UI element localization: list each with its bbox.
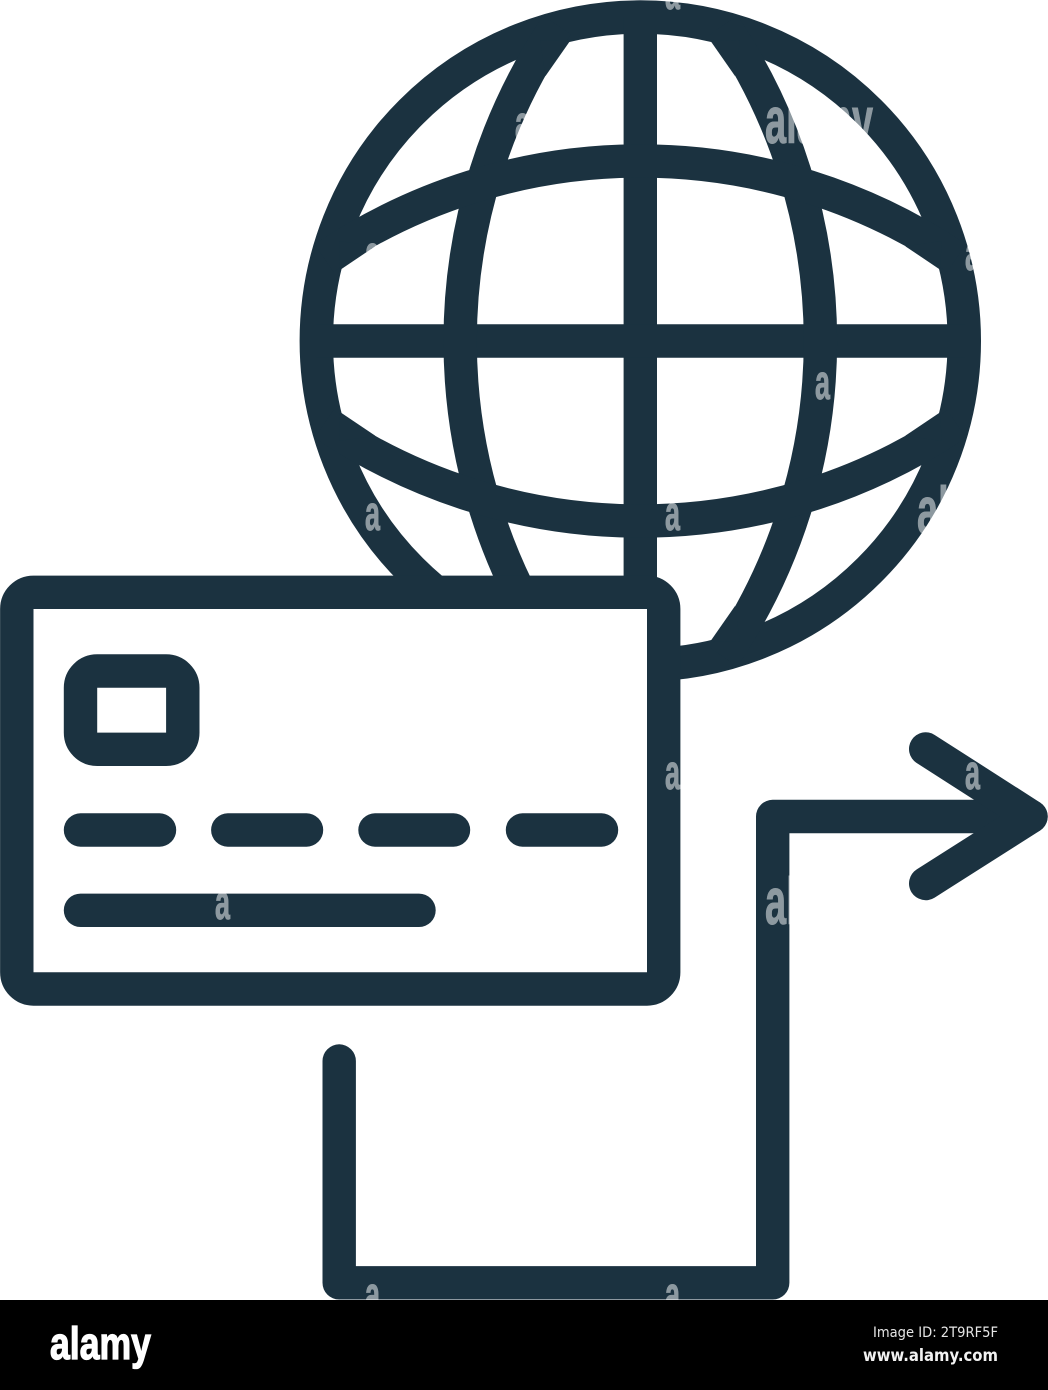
icon: credit card [17,592,664,989]
watermark letters: a [965,746,980,800]
watermark letters: a [815,356,830,410]
card number dashes [80,813,602,847]
icon: globe [316,17,965,665]
image id: Image ID: 2T9RF5F [873,1325,998,1341]
watermark letters: alamy [765,864,873,938]
watermark letters: a [365,227,380,281]
cardholder name line [80,894,419,927]
footer logo: alamy [50,1318,151,1369]
watermark letters [215,0,1025,1322]
watermark letters: a [665,746,680,800]
watermark letters: a [665,487,680,541]
card body [17,592,664,989]
watermark letters: a [515,97,530,151]
website: www.alamy.com [863,1346,998,1365]
watermark letters: a [365,487,380,541]
arrow: payment flow [339,749,1031,1283]
footer bar [0,1300,1048,1390]
watermark letters: a [215,876,230,930]
watermark letters: a [965,227,980,281]
card chip [80,671,183,749]
watermark letters: a [665,1268,680,1322]
watermark letters: a [365,1268,380,1322]
watermark letters: alamy [765,83,873,157]
